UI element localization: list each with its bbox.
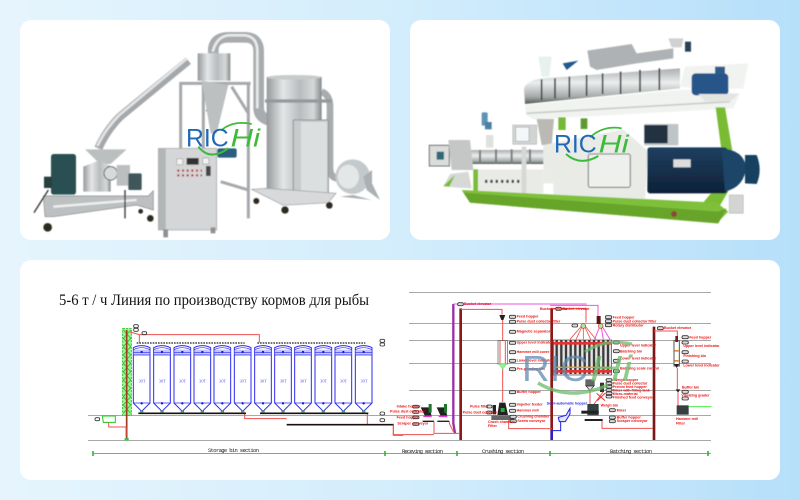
red labels: Pulse dust collector: [390, 410, 425, 414]
red labels: Mixer with filling tank: [613, 389, 651, 393]
red labels: Impeller feeder: [517, 403, 543, 407]
red labels: Finished feed conveyor: [613, 395, 654, 399]
logo: RICHi: Hi: [231, 124, 262, 152]
pink feeders: [550, 305, 610, 339]
red labels: Hammer mill: [517, 409, 539, 413]
silos: 30T: [159, 379, 166, 384]
red labels: Lower level indicator: [683, 364, 720, 368]
red labels: Buffer hopper: [517, 390, 541, 394]
red labels: Pulse filter: [470, 404, 489, 408]
illustration: twin screw fish feed extruder: [429, 38, 760, 223]
red labels: Bucket elevator: [464, 302, 492, 306]
red labels: Feed hopper: [613, 315, 635, 319]
silos: 30T: [300, 379, 307, 384]
elevator: [123, 329, 131, 440]
feeder: [587, 44, 673, 70]
illustration: pulverizer with cyclone and dust collector: [34, 35, 380, 237]
panel: extruder machine photo: [410, 20, 780, 240]
logo: RICHi watermark: [522, 342, 633, 393]
terminal box: [644, 124, 678, 145]
silos: 30T: [260, 379, 267, 384]
long duct: [98, 61, 188, 148]
main lift columns: [453, 304, 455, 433]
red labels: Buffer bin: [682, 385, 699, 389]
tank: [267, 77, 322, 194]
section label: crushing: Crushing section: [482, 448, 524, 455]
extruder barrel: [460, 150, 543, 164]
logo: RICHi: [554, 128, 630, 161]
mill body: [83, 160, 111, 192]
logo: RICHi: RIC: [554, 131, 597, 159]
red labels: Bucket elevator: [562, 307, 590, 311]
receiving and crushing sections: Semi-automatic hopper: [547, 402, 588, 406]
red labels: Filter: [676, 421, 686, 425]
receiving hoppers: [393, 404, 460, 435]
logo: RICHi watermark: Hi: [590, 348, 633, 389]
control cabinet: [158, 148, 217, 230]
silos: 30T: [240, 379, 247, 384]
red labels: Scraper conveyor: [397, 422, 429, 426]
logo: RICHi: Hi: [599, 131, 630, 159]
blower: [335, 159, 370, 194]
blue hopper: [558, 408, 570, 422]
cabinet: [543, 129, 648, 200]
bottom conveyors: [138, 413, 394, 425]
mill motor: [51, 154, 76, 195]
intake pit: [102, 416, 115, 422]
cyclone: [198, 53, 230, 81]
silos: 30T: [340, 379, 347, 384]
lower housing: [473, 169, 543, 193]
red labels: Pulse dust collector: [613, 382, 648, 386]
red labels: Feed hopper: [397, 415, 419, 419]
lift: [650, 327, 658, 440]
red labels: Feed hopper: [689, 335, 712, 339]
red labels: Bucket elevator: [540, 307, 568, 311]
conditioner frame: [525, 63, 748, 119]
red labels: Scraper conveyor: [617, 419, 648, 423]
red labels: Intake hopper: [397, 404, 421, 408]
silos: 30T: [320, 379, 327, 384]
red labels: Lower level indicator: [517, 359, 554, 363]
red labels: Screw conveyor: [517, 419, 546, 423]
red labels: Hammer mill: [676, 417, 698, 421]
distributors: [570, 324, 596, 339]
finished bin column: [674, 336, 711, 415]
red labels: Buffer hopper: [617, 415, 641, 419]
red labels: Pulse dust collector filter: [613, 319, 657, 323]
tag marks: [95, 325, 385, 422]
red labels: [390, 302, 590, 428]
dashed conveyor: [137, 341, 365, 345]
mill base: [43, 191, 153, 217]
red labels: Upper level indicator: [683, 344, 720, 348]
small blue motor: [217, 148, 237, 158]
red labels: Batching scale control: [620, 367, 659, 371]
red labels: Hammer mill cover: [517, 350, 550, 354]
red labels: Filter: [488, 424, 498, 428]
tank door: [293, 120, 328, 198]
red labels: Bucket elevator: [664, 326, 692, 330]
mill hopper: [85, 149, 127, 164]
receiving and crushing sections: [390, 302, 590, 440]
red labels: Pulse dust collector: [463, 410, 498, 414]
green support leg: [698, 107, 737, 208]
panel: grinding machine photo: [20, 20, 390, 240]
conditioner barrel: [524, 68, 680, 104]
panel: production line diagram: [20, 260, 780, 480]
frame: [179, 83, 251, 218]
red conveyor routes: [103, 332, 403, 437]
main motor: [647, 147, 727, 193]
top motor: [692, 73, 728, 95]
red labels: Premix feed hopper: [613, 385, 647, 389]
top pipe: [213, 37, 273, 122]
silos: 30T: [219, 379, 227, 384]
silos: 30T: [280, 379, 287, 384]
red labels: Crush chamber: [488, 420, 515, 424]
red labels: Rotary distributor: [613, 323, 644, 327]
tank base: [252, 188, 336, 205]
tag marks: [572, 316, 688, 423]
batching bins: [553, 340, 612, 375]
tag marks: [413, 303, 561, 425]
crusher column: [491, 315, 552, 429]
logo: RICHi: [186, 123, 262, 155]
feed column: [537, 119, 554, 145]
section label: storage bin: Storage bin section: [208, 447, 259, 454]
red labels: Pulse dust collector filter: [517, 320, 561, 324]
red labels: Finishing bin: [683, 354, 706, 358]
red labels: Upper level indicator: [620, 344, 657, 348]
scale and mixer: [581, 379, 653, 428]
red labels: Upper level indicator: [517, 341, 553, 345]
red labels: Weigh bin: [601, 404, 618, 408]
section dimension line: [93, 451, 711, 456]
silos: [133, 346, 372, 412]
red labels: Lower level indicator: [620, 356, 657, 360]
red labels: Mixer: [617, 408, 627, 412]
red labels: Batching bin: [620, 349, 642, 353]
side feeder: [486, 135, 493, 148]
red labels: Micro-material: [613, 392, 638, 396]
red labels: Crushing chamber: [517, 415, 550, 419]
storage bin section: [95, 325, 403, 440]
green base: [462, 190, 728, 223]
title: 5-6 т / ч Линия по производству кормов для рыбы: [59, 292, 369, 309]
section label: batching: Batching section: [610, 448, 652, 455]
red labels: Vibrating grader: [681, 393, 710, 397]
red labels: Weigh hopper: [614, 378, 639, 382]
section label: receiving: Receving section: [402, 448, 443, 455]
red labels: Pre-grinding bin: [517, 367, 545, 371]
tank pipe: [322, 92, 337, 178]
red labels: Feed hopper: [517, 315, 539, 319]
die head: [429, 145, 449, 166]
red labels: [540, 307, 720, 425]
floor grid lines: [88, 292, 711, 440]
silos: 30T: [179, 379, 187, 384]
logo: RICHi: RIC: [186, 124, 229, 152]
silos: 30T: [199, 379, 207, 384]
batching section: [540, 305, 720, 440]
screen: [513, 125, 537, 144]
logo: RICHi watermark: RIC: [522, 348, 588, 389]
silos: 30T: [361, 379, 368, 384]
red labels: Magnetic separator: [517, 330, 551, 334]
silos: 30T: [139, 379, 146, 384]
